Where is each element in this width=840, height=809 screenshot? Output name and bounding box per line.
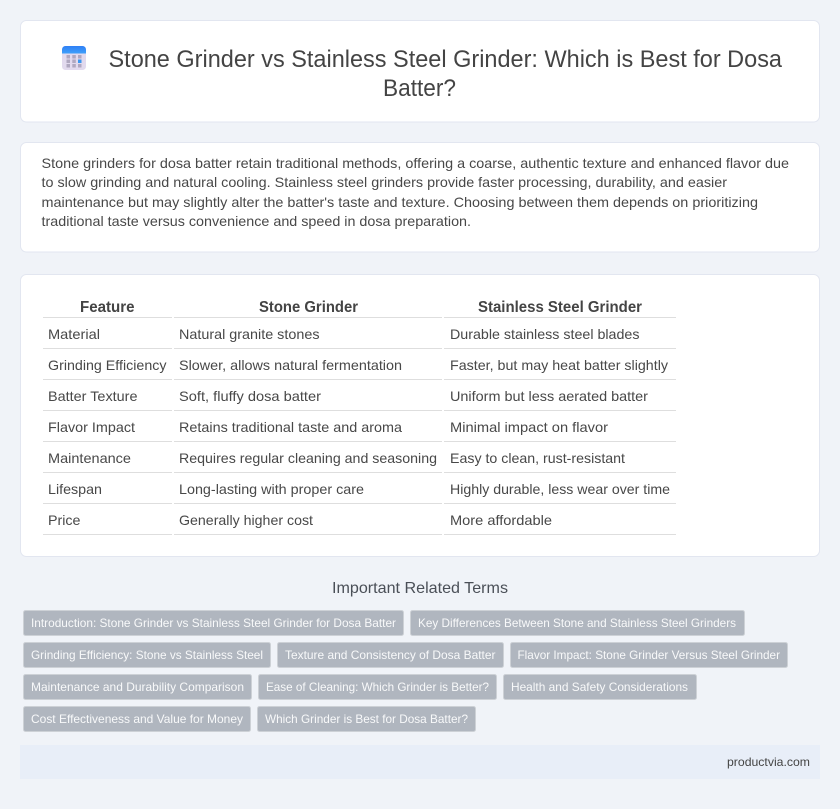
- table row: grinding efficiency: Slower, allows natural fermentation: [179, 357, 402, 373]
- tag: health and safety: [504, 674, 696, 700]
- table row: lifespan: Highly durable, less wear over time: [450, 481, 670, 497]
- summary text: traditional taste versus convenience and speed in dosa preparation.: [42, 213, 471, 229]
- table row: flavor impact: Minimal impact on flavor: [450, 419, 608, 435]
- summary text: [42, 155, 789, 229]
- table row: price: [43, 512, 676, 535]
- summary text: Stone grinders for dosa batter retain traditional methods, offering a coarse, authentic texture and enhanced flavor due: [42, 155, 789, 171]
- tag: maintenance and durability: [24, 674, 252, 700]
- icon: calendar grid: [62, 46, 86, 70]
- tag: flavor impact: [510, 642, 788, 668]
- related term tags: [24, 610, 788, 732]
- table row: lifespan: Lifespan: [48, 481, 102, 497]
- table header row: Stone Grinder: [259, 299, 358, 316]
- table row: batter texture: Batter Texture: [48, 388, 138, 404]
- tag: flavor impact: Flavor Impact: Stone Grinder Versus Steel Grinder: [518, 648, 780, 662]
- table row: batter texture: Uniform but less aerated batter: [450, 388, 648, 404]
- summary text: to slow grinding and natural cooling. Stainless steel grinders provide faster processing, durability, and easier: [42, 174, 727, 190]
- summary text: maintenance but may slightly alter the batter's taste and texture. Choosing between them depends on prioritizing: [42, 194, 758, 210]
- table row: lifespan: [43, 481, 676, 504]
- table row: price: More affordable: [450, 512, 552, 528]
- heading: important related terms: Important Related Terms: [332, 580, 508, 597]
- table row: flavor impact: [43, 419, 676, 442]
- table row: batter texture: [43, 388, 676, 411]
- tag: ease of cleaning: Ease of Cleaning: Which Grinder is Better?: [266, 680, 489, 694]
- title: Stone Grinder vs Stainless Steel Grinder: Which is Best for Dosa: [108, 46, 783, 73]
- table row: grinding efficiency: Faster, but may heat batter slightly: [450, 357, 668, 373]
- title: Batter?: [383, 75, 456, 102]
- table row: batter texture: Soft, fluffy dosa batter: [179, 388, 321, 404]
- tag: maintenance and durability: Maintenance and Durability Comparison: [31, 680, 244, 694]
- table row: material: Material: [48, 326, 100, 342]
- table row: maintenance: [43, 450, 676, 473]
- tag: health and safety: Health and Safety Considerations: [511, 680, 688, 694]
- tag: which grinder is best: [258, 706, 476, 732]
- tag: key differences: [410, 610, 744, 636]
- tag: grinding efficiency: [24, 642, 270, 668]
- tag: key differences: Key Differences Between Stone and Stainless Steel Grinders: [418, 616, 736, 630]
- table row: grinding efficiency: [43, 357, 676, 380]
- title: [108, 46, 783, 102]
- panel: summary paragraph: [20, 142, 820, 252]
- table row: flavor impact: Flavor Impact: [48, 419, 135, 435]
- panel: comparison table: [20, 274, 820, 556]
- table row: price: Price: [48, 512, 81, 528]
- tag: introduction: Introduction: Stone Grinder vs Stainless Steel Grinder for Dosa Batter: [31, 616, 396, 630]
- tag: cost effectiveness: [24, 706, 250, 732]
- table row: material: Natural granite stones: [179, 326, 320, 342]
- tag: texture and consistency: Texture and Consistency of Dosa Batter: [285, 648, 496, 662]
- tag: which grinder is best: Which Grinder is Best for Dosa Batter?: [265, 712, 468, 726]
- table row: maintenance: Requires regular cleaning and seasoning: [179, 450, 437, 466]
- footer bar: [20, 745, 820, 779]
- panel: header: [20, 20, 820, 122]
- table row: price: Generally higher cost: [179, 512, 313, 528]
- table header row: [43, 299, 676, 318]
- table row: maintenance: Easy to clean, rust-resistant: [450, 450, 625, 466]
- table row: grinding efficiency: Grinding Efficiency: [48, 357, 166, 373]
- table header row: Feature: [80, 299, 135, 316]
- table row: lifespan: Long-lasting with proper care: [179, 481, 364, 497]
- footer bar: productvia.com: [727, 755, 810, 769]
- table row: flavor impact: Retains traditional taste and aroma: [179, 419, 402, 435]
- tag: cost effectiveness: Cost Effectiveness and Value for Money: [31, 712, 243, 726]
- tag: grinding efficiency: Grinding Efficiency: Stone vs Stainless Steel: [31, 648, 263, 662]
- tag: texture and consistency: [278, 642, 504, 668]
- tag: ease of cleaning: [258, 674, 496, 700]
- table row: maintenance: Maintenance: [48, 450, 131, 466]
- tag: introduction: [24, 610, 404, 636]
- table row: material: Durable stainless steel blades: [450, 326, 640, 342]
- table header row: Stainless Steel Grinder: [478, 299, 642, 316]
- table row: material: [43, 326, 676, 349]
